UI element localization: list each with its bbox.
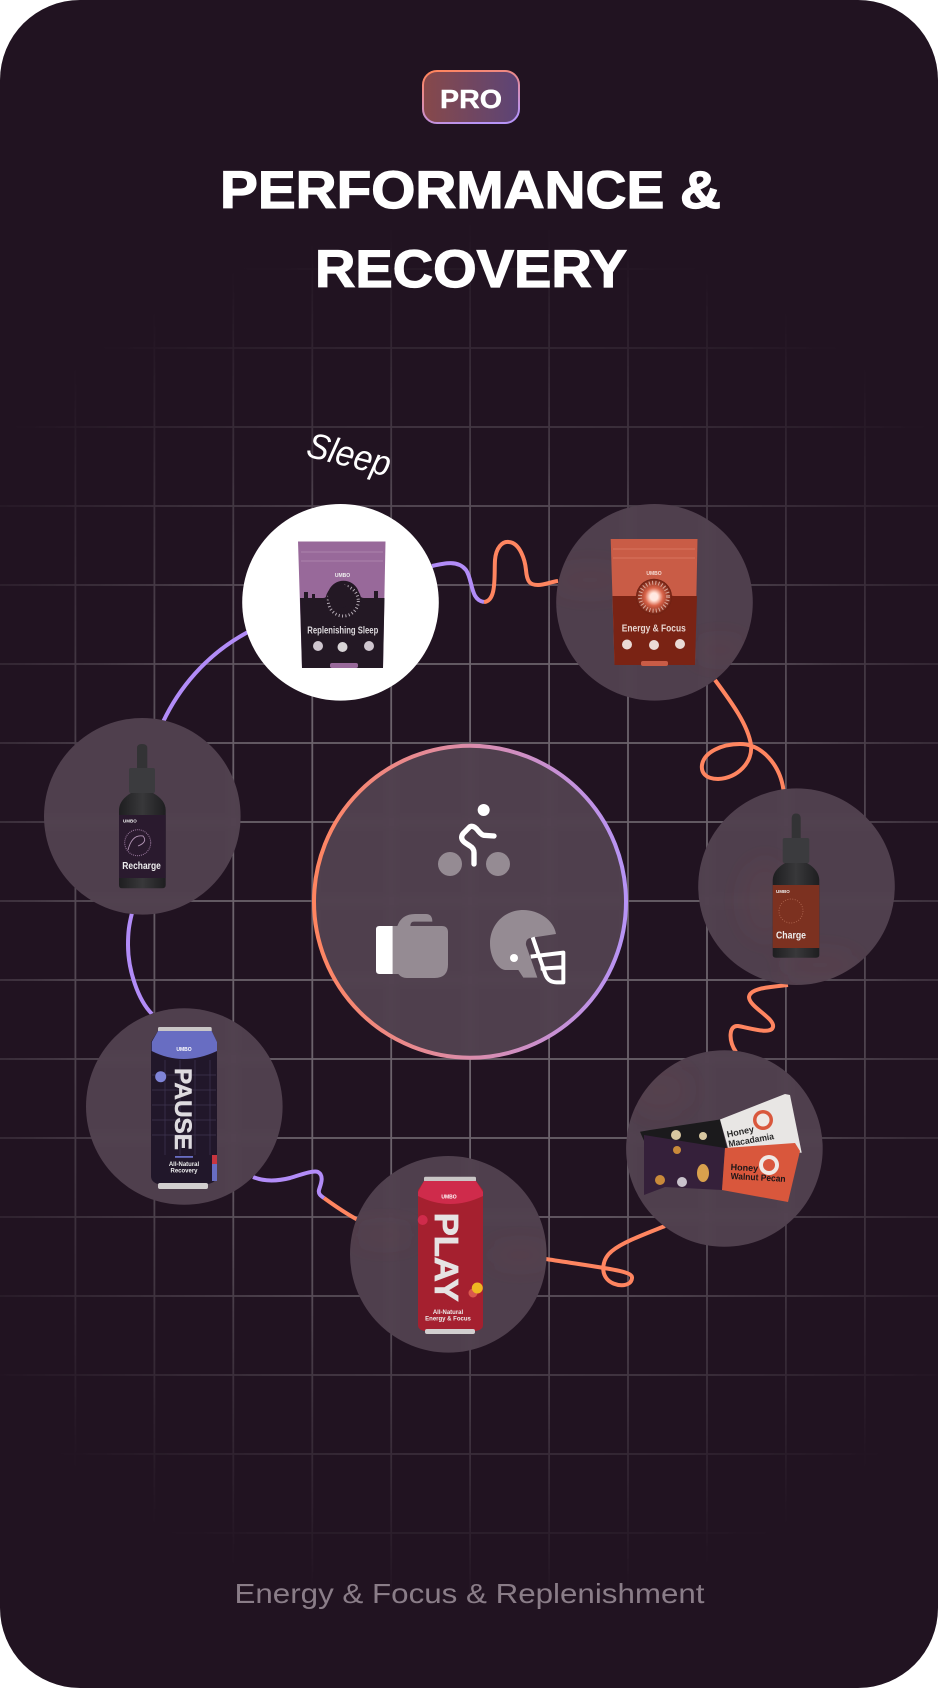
product: Honey bars: Honey xyxy=(730,1162,758,1173)
product: PLAY can xyxy=(418,1177,483,1334)
PRO badge xyxy=(423,71,519,123)
label: Sleep: Sleep xyxy=(303,424,395,484)
icon: football helmet xyxy=(490,910,563,982)
disc: charge xyxy=(698,788,895,985)
hub ring xyxy=(314,746,626,1058)
footer caption: Energy & Focus & Replenishment xyxy=(234,1578,705,1609)
disc: pause xyxy=(86,1008,283,1205)
pouch xyxy=(298,542,386,668)
icon: cyclist xyxy=(438,804,510,876)
top bar wrapper xyxy=(640,1120,727,1150)
disc: hub xyxy=(314,746,626,1058)
lower bar wrapper xyxy=(644,1135,725,1195)
disc: play xyxy=(350,1156,547,1353)
product: Honey bars: Macadamia xyxy=(728,1131,776,1149)
product: Replenishing Sleep pouch on white disc xyxy=(242,504,439,701)
disc: energy xyxy=(556,504,753,701)
product: PAUSE can: PAUSE xyxy=(169,1068,196,1150)
connector ring xyxy=(128,542,788,1285)
product: Charge dropper bottle: UMBO xyxy=(776,889,790,894)
disc: recharge xyxy=(44,718,241,915)
product: Energy & Focus pouch: UMBO xyxy=(646,571,662,577)
connector: bars to play xyxy=(546,1226,665,1285)
product: Charge dropper bottle xyxy=(773,814,819,958)
disc: bars xyxy=(626,1050,823,1247)
product: Recharge dropper bottle: UMBO xyxy=(123,818,137,824)
product: PLAY can: PLAY xyxy=(428,1213,465,1302)
pouch: Replenishing Sleep xyxy=(307,626,378,636)
connector: pause to recharge xyxy=(128,913,152,1014)
product: PAUSE can: All-Natural xyxy=(169,1162,199,1168)
product: Honey bars: Honey xyxy=(726,1124,755,1139)
icons drawn in local coordinates xyxy=(376,804,563,982)
product: Honey bars xyxy=(640,1094,802,1202)
product: Honey bars: Walnut Pecan xyxy=(730,1171,786,1184)
product: PAUSE can xyxy=(151,1027,217,1189)
title xyxy=(220,161,721,299)
connector: play to pause, orange xyxy=(324,1198,358,1220)
product: Charge dropper bottle: Charge xyxy=(776,930,806,942)
product: Energy & Focus pouch xyxy=(611,539,698,666)
connector: play to pause, purple xyxy=(253,1172,324,1198)
product: PLAY can: All-Natural xyxy=(433,1310,463,1316)
connector: energy to charge xyxy=(702,680,784,790)
PRO badge: PRO xyxy=(440,84,502,114)
product: PAUSE can: Recovery xyxy=(170,1168,198,1174)
product: PLAY can: UMBO xyxy=(441,1194,457,1200)
central hub with sport icons xyxy=(314,746,626,1058)
connector: recharge to sleep xyxy=(163,632,248,722)
connector: charge to bars xyxy=(731,985,788,1052)
discs xyxy=(44,504,895,1353)
connector: sleep to energy, purple xyxy=(432,563,484,602)
product: Energy & Focus pouch: Energy & Focus xyxy=(622,624,686,634)
product: PLAY can: Energy & Focus xyxy=(425,1316,471,1322)
white disc xyxy=(242,504,439,701)
title: PERFORMANCE & xyxy=(220,161,721,220)
icon: boxing glove xyxy=(376,914,448,978)
pouch: UMBO xyxy=(335,573,350,579)
connector: sleep to energy, orange xyxy=(484,542,558,602)
product: Recharge dropper bottle xyxy=(119,744,166,888)
product: PAUSE can: UMBO xyxy=(176,1047,192,1053)
product: Recharge dropper bottle: Recharge xyxy=(122,861,161,872)
title: RECOVERY xyxy=(315,240,627,299)
